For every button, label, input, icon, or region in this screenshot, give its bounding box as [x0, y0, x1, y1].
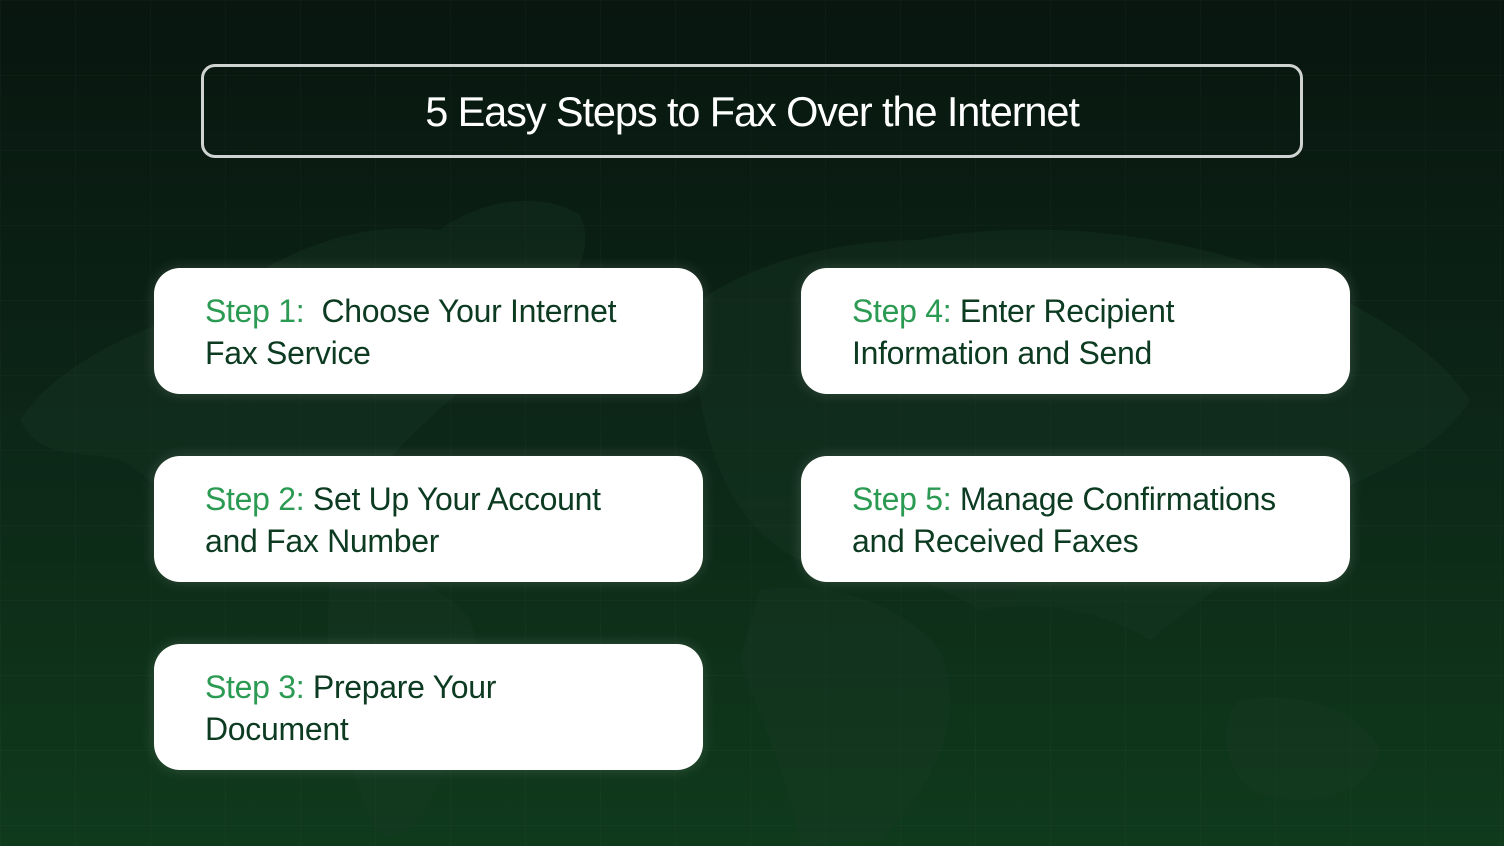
card: step 3: Step 3: Prepare Your [205, 669, 496, 705]
card: step 5: and Received Faxes [852, 523, 1138, 559]
title [201, 64, 1303, 158]
card: step 1: Fax Service [205, 335, 371, 371]
card: step 1 [154, 268, 703, 394]
card: step 2 [154, 456, 703, 582]
card: step 2: and Fax Number [205, 523, 439, 559]
card: step 1: Step 1: Choose Your Internet [205, 293, 616, 329]
card: step 4 [801, 268, 1350, 394]
title: 5 Easy Steps to Fax Over the Internet [425, 88, 1079, 135]
card: step 5: Step 5: Manage Confirmations [852, 481, 1276, 517]
card: step 5 [801, 456, 1350, 582]
card: step 4: Step 4: Enter Recipient [852, 293, 1174, 329]
card: step 4: Information and Send [852, 335, 1152, 371]
card: step 2: Step 2: Set Up Your Account [205, 481, 601, 517]
card: step 3: Document [205, 711, 348, 747]
card: step 3 [154, 644, 703, 770]
